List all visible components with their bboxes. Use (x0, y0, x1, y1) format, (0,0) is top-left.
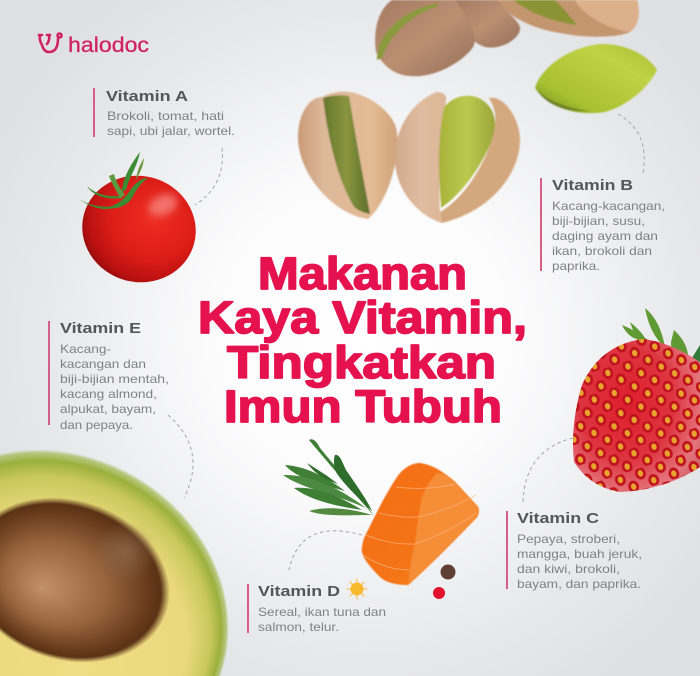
pistachio: left (298, 92, 397, 219)
text block: vitamin E: kacang almond, (60, 387, 157, 401)
text block: vitamin D: Sereal, ikan tuna dan (258, 605, 386, 619)
strawberry leaves (622, 308, 700, 365)
text block: vitamin B: daging ayam dan (552, 229, 658, 243)
text block: vitamin D: salmon, telur. (258, 620, 339, 634)
image: top pistachios (375, 0, 657, 113)
text block: vitamin B: Kacang-kacangan, (552, 199, 665, 213)
title (198, 248, 527, 432)
logo: halodoc (39, 33, 149, 57)
text block: vitamin C: Pepaya, stroberi, (517, 532, 620, 546)
text block: vitamin C (506, 510, 642, 591)
text block: vitamin A (93, 88, 235, 138)
avocado seed (0, 495, 175, 670)
salmon lighter side (408, 473, 479, 585)
title: Makanan (258, 248, 467, 299)
text block: vitamin B: biji-bijian, susu, (552, 214, 645, 228)
salmon fillet (362, 463, 479, 585)
connector: vitamin E (168, 415, 193, 498)
connector: vitamin C (523, 438, 573, 502)
text block: vitamin A: Vitamin A (106, 88, 188, 105)
logo wordmark: halodoc (68, 33, 149, 57)
text block: vitamin E: Kacang- (60, 342, 111, 356)
rosemary sprig (283, 439, 374, 516)
text block: vitamin B (540, 177, 665, 273)
avocado flesh (0, 440, 236, 676)
icon: sun (347, 579, 367, 599)
connector: vitamin D (289, 531, 362, 570)
image: strawberry (573, 308, 700, 492)
text block: vitamin C: mangga, buah jeruk, (517, 547, 642, 561)
title: Tingkatkan (227, 337, 496, 388)
tomato highlight (145, 190, 181, 220)
peppercorn red (433, 587, 445, 599)
text block: vitamin D (247, 579, 386, 634)
salmon fat lines (363, 484, 476, 570)
pistachio kernel (535, 44, 657, 113)
text block: vitamin E: kacangan dan (60, 357, 146, 371)
image: avocado (0, 440, 236, 676)
text block: vitamin C: dan kiwi, brokoli, (517, 562, 620, 576)
connector: vitamin B (618, 114, 644, 173)
pistachio: top middle (452, 0, 520, 48)
text block: vitamin E: biji-bijian mentah, (60, 372, 169, 386)
image: tomato (70, 152, 208, 295)
tomato body (70, 163, 208, 295)
strawberry body (573, 339, 700, 492)
text block: vitamin B: Vitamin B (552, 177, 633, 194)
text block: vitamin A: Brokoli, tomat, hati (107, 109, 224, 123)
text block: vitamin C: Vitamin C (517, 510, 599, 527)
title: Imun Tubuh (224, 381, 502, 432)
text block: vitamin C: bayam, dan paprika. (517, 577, 641, 591)
image: two open pistachios (298, 92, 520, 223)
text block: vitamin E (48, 320, 169, 432)
text block: vitamin E: dan pepaya. (60, 418, 133, 432)
avocado seed highlight (93, 522, 157, 582)
connector: vitamin A (195, 148, 222, 205)
title: Kaya Vitamin, (198, 292, 527, 343)
strawberry seeds (573, 339, 700, 492)
peppercorn brown (440, 564, 456, 580)
pistachio: top right, cropped (498, 0, 639, 37)
text block: vitamin A: sapi, ubi jalar, wortel. (107, 124, 235, 138)
text block: vitamin B: ikan, brokoli dan (552, 244, 652, 258)
image: rosemary and salmon (283, 439, 479, 599)
pistachio: top left (375, 0, 475, 76)
text block: vitamin B: paprika. (552, 259, 600, 273)
tomato calyx (79, 152, 148, 209)
pistachio: right (395, 92, 520, 223)
text block: vitamin E: Vitamin E (60, 320, 141, 337)
text block: vitamin D: Vitamin D (258, 583, 340, 600)
icon: stethoscope (39, 34, 62, 52)
text block: vitamin E: alpukat, bayam, (60, 402, 156, 416)
